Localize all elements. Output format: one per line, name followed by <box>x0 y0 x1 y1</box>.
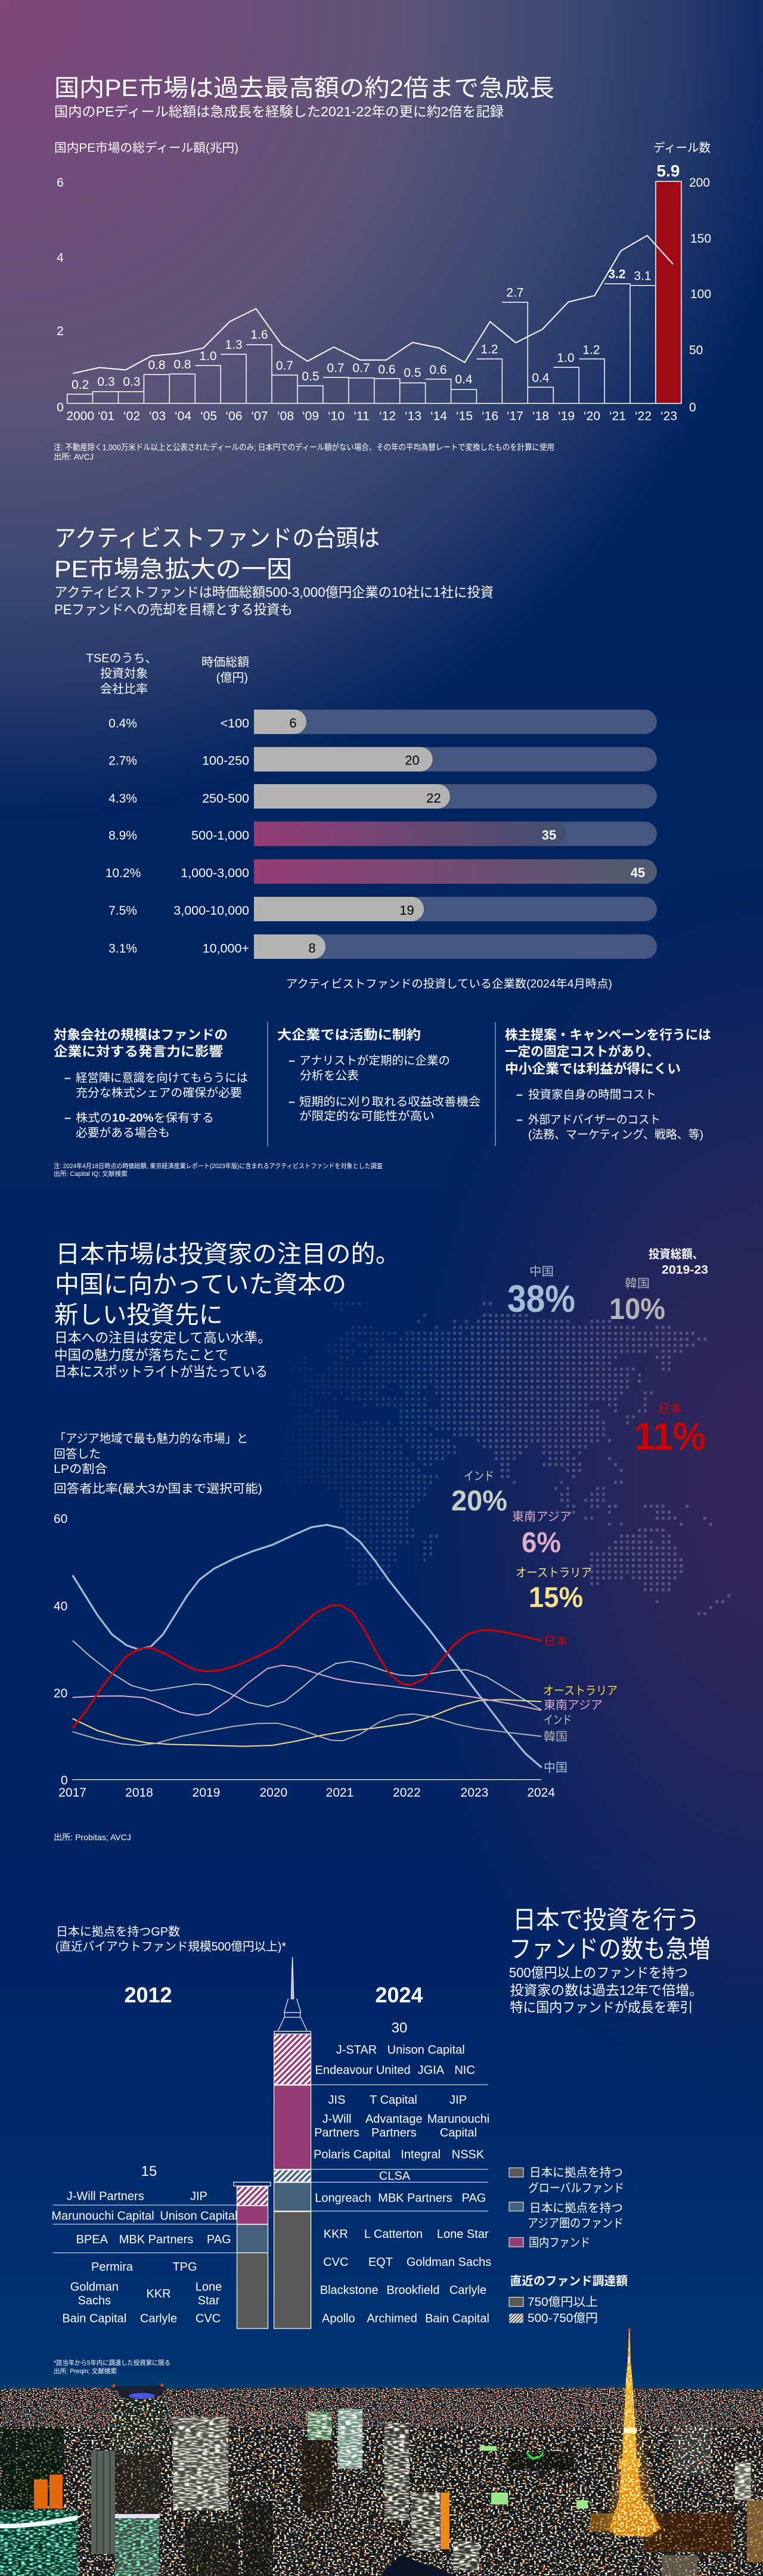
line: Korea <box>73 1714 541 1745</box>
line: Japan <box>73 1605 541 1727</box>
chart description <box>54 1432 262 1496</box>
chart title: 日本に拠点を持つGP数 <box>56 1925 180 1939</box>
fund names 2024: J-STAR <box>336 2044 377 2057</box>
fund names 2012: PAG <box>207 2233 231 2246</box>
fund names 2012: BPEA <box>76 2233 108 2246</box>
year labels: ‘06 <box>225 409 243 423</box>
region share: China: 中国 <box>529 1265 554 1278</box>
region share: Korea: 韓国 <box>625 1277 650 1290</box>
bar value labels: 0.7 <box>276 359 293 373</box>
legend: fund type: アジア圏のファンド <box>528 2217 624 2230</box>
column: large companies: 短期的に刈り取れる収益改善機会 <box>299 1095 480 1109</box>
fund names 2024: Endeavour United <box>315 2064 411 2077</box>
dark foreground wedge <box>380 2555 457 2576</box>
bar value labels: 2.7 <box>506 286 524 299</box>
fund names 2024: Marunouchi <box>427 2113 489 2126</box>
fund names 2012: Lone <box>196 2280 222 2293</box>
bar value labels: 5.9 <box>657 162 680 180</box>
subtitle <box>509 1965 703 2015</box>
year labels: ‘01 <box>98 409 114 423</box>
bar value labels: 0.4 <box>532 371 550 385</box>
left axis labels: 4 <box>57 251 64 265</box>
column: fixed costs: – <box>516 1088 523 1101</box>
fund names 2024: Partners <box>371 2126 417 2140</box>
right axis labels: 50 <box>689 343 703 357</box>
fund names 2012: Unison Capital <box>160 2210 237 2223</box>
fund names 2024: PAG <box>462 2191 486 2205</box>
left axis labels <box>57 176 64 414</box>
title: アクティビストファンドの台頭は <box>54 525 380 552</box>
horizontal bar chart: activist investments: 45 <box>631 865 645 880</box>
fund names 2012: Goldman <box>70 2280 119 2293</box>
fund names 2012: KKR <box>146 2287 171 2301</box>
region share: Australia: 15% <box>529 1582 583 1614</box>
title: 中国に向かっていた資本の <box>55 1271 346 1298</box>
fund names 2012: TPG <box>172 2261 197 2274</box>
section: Japan attractiveness <box>54 1240 730 1842</box>
fund names 2024: CLSA <box>379 2170 411 2183</box>
tower 2024 with spire <box>274 1957 311 2329</box>
title: ファンドの数も急増 <box>509 1935 711 1963</box>
horizontal bar chart: activist investments: 22 <box>426 791 441 806</box>
fund names 2012: Star <box>198 2295 220 2308</box>
TSE share labels: 0.4% <box>108 717 137 730</box>
line chart year labels: 2023 <box>461 1786 488 1800</box>
chart caption: アクティビストファンドの投資している企業数(2024年4月時点) <box>286 977 612 990</box>
column header: market cap: (億円) <box>216 671 248 685</box>
fund names 2024: J-Will <box>322 2113 351 2126</box>
right axis title: ディール数 <box>653 141 711 155</box>
footnote: 出所: Capital IQ; 文献検索 <box>54 1169 128 1178</box>
line labels <box>543 1634 618 1775</box>
bar value labels: 3.2 <box>608 267 626 281</box>
market cap labels: 1,000-3,000 <box>181 866 249 880</box>
subtitle: PEファンドへの売却を目標とする投資も <box>54 602 293 617</box>
horizontal bar chart: activist investments: 35 <box>542 828 556 843</box>
bar value labels: 0.8 <box>148 358 166 372</box>
column: large companies: – <box>289 1054 295 1067</box>
TSE share labels: 4.3% <box>108 792 137 806</box>
year labels: 2000 <box>66 409 94 423</box>
right axis labels: 150 <box>690 232 711 246</box>
column: large companies: 大企業では活動に制約 <box>277 1027 421 1042</box>
title: 日本市場は投資家の注目の的。 <box>55 1240 400 1268</box>
column: large companies: – <box>289 1095 295 1109</box>
bar value labels: 0.7 <box>327 361 345 375</box>
column: fixed costs: – <box>516 1113 523 1126</box>
year labels: ‘09 <box>302 409 319 423</box>
line labels: 中国 <box>544 1761 567 1775</box>
market cap labels: 3,000-10,000 <box>173 903 249 918</box>
green lights <box>527 2452 543 2458</box>
title: 新しい投資先に <box>54 1301 223 1329</box>
fund names 2024 <box>314 2044 491 2325</box>
bar value labels: 1.6 <box>250 328 268 342</box>
fund names 2024: Blackstone <box>320 2284 379 2297</box>
column: company size: 企業に対する発言力に影響 <box>54 1044 223 1059</box>
fund names 2024: Brookfield <box>387 2284 439 2297</box>
Tokyo Tower <box>608 2329 660 2537</box>
line labels: インド <box>544 1714 572 1727</box>
line labels: 日本 <box>544 1634 568 1648</box>
region share: India <box>451 1470 507 1517</box>
footnote: 注: 2024年4月18日時点の時価総額, 東京経済産業レポート(2023年版)に含まれるアクティビストファンドを対象とした調査 <box>54 1162 383 1170</box>
column: fixed costs <box>505 1027 711 1141</box>
line: Australia <box>73 1699 541 1747</box>
footnote: 注: 不動産除く1,000万米ドル以上と公表されたディールのみ; 日本円でのディール額がない場合、その年の平均為替レートで変換したものを計算に使用 <box>54 442 554 452</box>
region share: Southeast Asia <box>512 1510 572 1559</box>
subtitle: 500億円以上のファンドを持つ <box>509 1965 688 1980</box>
column: company size: 必要がある場合も <box>76 1126 170 1140</box>
column: company size: 対象会社の規模はファンドの <box>54 1027 228 1042</box>
column: company size: 経営陣に意識を向けてもらうには <box>76 1072 248 1085</box>
year labels: ‘19 <box>558 409 575 423</box>
fund names 2012: MBK Partners <box>119 2233 193 2246</box>
line chart axis labels: 60 <box>54 1512 67 1526</box>
column: fixed costs: 中小企業では利益が得にくい <box>505 1061 681 1076</box>
section: PE market growth <box>54 75 711 462</box>
fund names 2024: Integral <box>401 2148 441 2161</box>
region share: India: 20% <box>451 1485 507 1517</box>
bar value labels: 0.5 <box>302 370 320 383</box>
fund names 2024: L Catterton <box>364 2228 423 2241</box>
orange lit building <box>34 2475 63 2509</box>
right axis labels: 0 <box>689 401 696 414</box>
fund names 2024: Goldman Sachs <box>407 2256 491 2269</box>
year labels: ‘04 <box>175 409 191 423</box>
chart description: 「アジア地域で最も魅力的な市場」と <box>54 1432 248 1445</box>
region share: Southeast Asia: 東南アジア <box>512 1510 572 1524</box>
bar value labels: 1.2 <box>582 343 600 357</box>
chart description: 回答者比率(最大3か国まで選択可能) <box>54 1482 262 1496</box>
subtitle: 日本への注目は安定して高い水準。 <box>54 1330 271 1345</box>
column: company size: – <box>64 1072 71 1085</box>
fund names 2024: Capital <box>440 2126 477 2140</box>
right axis labels <box>689 176 711 414</box>
horizontal bar chart: activist investments: 20 <box>405 753 420 768</box>
fund names 2024: Longreach <box>315 2191 371 2205</box>
fund names 2024: EQT <box>368 2256 393 2269</box>
investment label: 投資総額、 <box>649 1247 703 1261</box>
column: fixed costs: 一定の固定コストがあり、 <box>505 1044 659 1059</box>
line: number of deals <box>73 236 673 373</box>
column: fixed costs: 株主提案・キャンペーンを行うには <box>505 1027 711 1042</box>
left axis labels: 6 <box>57 176 64 190</box>
fund names 2024: JIS <box>328 2094 345 2107</box>
year labels: ‘15 <box>456 409 473 423</box>
bar value labels: 0.6 <box>429 363 447 377</box>
line labels: オーストラリア <box>543 1685 618 1698</box>
region share: Australia <box>516 1566 592 1614</box>
year labels: ‘11 <box>353 409 370 423</box>
footnote: *該当年から5年内に調達した投資家に限る <box>54 2358 170 2367</box>
fund names 2024: Advantage <box>365 2113 423 2126</box>
Tokyo night skyline image <box>0 2329 763 2576</box>
fund names 2024: MBK Partners <box>378 2191 452 2205</box>
legend: fund type: 日本に拠点を持つ <box>529 2166 623 2179</box>
year labels: ‘14 <box>430 409 447 423</box>
fund names 2012 <box>51 2190 237 2325</box>
TSE share labels: 10.2% <box>106 866 141 880</box>
bar value labels: 0.5 <box>404 366 421 380</box>
column header: TSE share: 会社比率 <box>100 682 148 696</box>
bar value labels: 1.0 <box>557 351 575 365</box>
title <box>54 1240 400 1329</box>
bar value labels: 1.0 <box>199 349 217 363</box>
market cap labels: 100-250 <box>202 754 249 768</box>
bar value labels: 0.7 <box>352 361 370 375</box>
source: 出所: Probitas; AVCJ <box>54 1832 131 1842</box>
chart description: LPの割合 <box>54 1462 107 1476</box>
market cap labels: 250-500 <box>202 791 249 806</box>
bar value labels: 3.1 <box>634 270 652 283</box>
subtitle: アクティビストファンドは時価総額500-3,000億円企業の10社に1社に投資 <box>54 584 494 600</box>
total 2024: 30 <box>392 2020 407 2036</box>
tower 2012 <box>234 2182 271 2329</box>
section: funds in Japan <box>51 1906 711 2375</box>
line chart year labels: 2019 <box>193 1786 220 1800</box>
line chart: LP preference by market <box>73 1525 541 1767</box>
column: large companies <box>277 1027 480 1123</box>
title: 国内PE市場は過去最高額の約2倍まで急成長 <box>54 75 554 101</box>
fund names 2024: JIP <box>449 2094 467 2107</box>
column: company size <box>54 1027 248 1140</box>
year labels: ‘02 <box>123 409 140 423</box>
horizontal bar chart: activist investments: 6 <box>289 716 297 730</box>
column: company size: 株式の10-20%を保有する <box>76 1111 214 1125</box>
title: 日本で投資を行う <box>513 1906 700 1934</box>
legend: fund size: 500-750億円 <box>528 2311 598 2325</box>
year labels: ‘08 <box>277 409 294 423</box>
fund names 2024: NIC <box>454 2064 475 2077</box>
dotted world map <box>286 1302 730 1615</box>
fund names 2012: CVC <box>196 2312 221 2325</box>
right axis labels: 200 <box>689 176 710 190</box>
line chart year labels: 2021 <box>326 1786 353 1800</box>
subtitle: 特に国内ファンドが成長を牽引 <box>510 1999 693 2015</box>
line chart axis labels: 20 <box>54 1686 67 1701</box>
left axis labels: 0 <box>57 401 64 414</box>
investment label <box>649 1247 708 1277</box>
horizontal bar chart: activist investments <box>254 710 657 959</box>
line labels: 東南アジア <box>544 1698 603 1712</box>
column: large companies: が限定的な可能性が高い <box>299 1110 435 1123</box>
chart title: (直近バイアウトファンド規模500億円以上)* <box>55 1940 286 1953</box>
subtitle: 投資家の数は過去12年で倍増。 <box>510 1982 703 1998</box>
year labels: ‘17 <box>507 409 523 423</box>
line chart year labels: 2017 <box>58 1786 86 1800</box>
year labels: ‘18 <box>532 409 549 423</box>
legend: fund size: 直近のファンド調達額 <box>510 2274 628 2288</box>
column: large companies: アナリストが定期的に企業の <box>299 1054 450 1067</box>
column header: TSE share <box>86 652 157 696</box>
region share: Japan: 日本 <box>658 1402 682 1416</box>
region share: China: 38% <box>507 1277 575 1320</box>
year labels: ‘10 <box>328 409 345 423</box>
fund names 2024: Archimed <box>367 2312 417 2325</box>
right axis labels: 100 <box>690 287 711 301</box>
year labels: ‘23 <box>660 409 677 423</box>
market cap labels <box>173 716 249 955</box>
market cap labels: <100 <box>221 716 249 730</box>
line chart axis labels: 0 <box>61 1773 68 1788</box>
fund names 2024: KKR <box>324 2228 348 2241</box>
footnote <box>54 1162 383 1178</box>
line: China <box>73 1525 541 1767</box>
column header: TSE share: 投資対象 <box>100 667 148 680</box>
column: company size: – <box>64 1111 71 1125</box>
year labels: ‘13 <box>405 409 421 423</box>
year labels: ‘21 <box>609 409 626 423</box>
line chart year labels: 2020 <box>259 1786 287 1800</box>
year heading 2024: 2024 <box>375 1983 423 2007</box>
horizontal bar chart: activist investments: 19 <box>399 903 414 918</box>
bar value labels <box>72 162 680 392</box>
region share: Southeast Asia: 6% <box>522 1527 561 1559</box>
legend: fund type: 日本に拠点を持つ <box>529 2202 623 2215</box>
TSE share labels: 8.9% <box>108 829 137 843</box>
legend: fund size: 750億円以上 <box>528 2295 598 2309</box>
fund names 2024: T Capital <box>370 2094 417 2107</box>
line chart year labels <box>58 1786 555 1800</box>
chart description: 回答した <box>54 1447 101 1461</box>
year labels: ‘03 <box>149 409 166 423</box>
fund names 2012: Bain Capital <box>62 2312 126 2325</box>
bar value labels: 0.2 <box>72 378 89 392</box>
year labels: ‘20 <box>584 409 600 423</box>
region share: Korea: 10% <box>609 1292 665 1326</box>
line chart year labels: 2024 <box>527 1786 555 1800</box>
fund names 2012: Permira <box>91 2261 134 2274</box>
line labels: 韓国 <box>544 1730 567 1744</box>
TSE share labels: 3.1% <box>108 942 137 955</box>
market cap labels: 10,000+ <box>203 941 249 955</box>
region share: Australia: オーストラリア <box>516 1566 592 1580</box>
fund names 2024: Bain Capital <box>425 2312 489 2325</box>
title <box>509 1906 711 1963</box>
region share: Japan: 11% <box>634 1414 706 1458</box>
fund names 2024: JGIA <box>418 2064 445 2077</box>
fund names 2024: Carlyle <box>449 2284 486 2297</box>
TSE share labels: 7.5% <box>108 904 137 918</box>
section: activist funds <box>54 525 711 1178</box>
year labels <box>66 409 677 423</box>
line: India <box>73 1641 541 1710</box>
year heading 2012: 2012 <box>124 1983 172 2007</box>
column: large companies: 分析を公表 <box>300 1069 359 1082</box>
bar value labels: 0.8 <box>173 358 191 371</box>
year labels: ‘12 <box>379 409 396 423</box>
fund names 2024: Partners <box>314 2126 359 2140</box>
fund names 2024: Unison Capital <box>387 2044 465 2057</box>
bar value labels: 0.6 <box>378 363 396 377</box>
fund names 2012: JIP <box>190 2190 207 2203</box>
fund names 2024: Lone Star <box>437 2228 489 2241</box>
title <box>54 525 380 583</box>
TSE share labels: 2.7% <box>108 754 137 768</box>
fund names 2012: Sachs <box>78 2295 111 2308</box>
bar value labels: 0.3 <box>97 375 115 389</box>
bar value labels: 1.2 <box>480 342 498 357</box>
column: company size: 充分な株式シェアの確保が必要 <box>76 1086 242 1100</box>
year labels: ‘07 <box>251 409 268 423</box>
legend: fund type: グローバルファンド <box>528 2181 624 2195</box>
year labels: ‘05 <box>200 409 217 423</box>
line: Southeast Asia <box>73 1665 541 1716</box>
fund names 2012: J-Will Partners <box>67 2190 144 2203</box>
market cap labels: 500-1,000 <box>191 828 249 843</box>
legend: fund type <box>509 2166 624 2249</box>
fund names 2024: Apollo <box>322 2312 355 2325</box>
column: fixed costs: (法務、マーケティング、戦略、等) <box>528 1128 703 1141</box>
subtitle <box>54 1330 271 1379</box>
subtitle <box>54 584 494 617</box>
footnote <box>54 2358 170 2375</box>
investment label: 2019-23 <box>662 1264 708 1277</box>
footnote: 出所: Preqin; 文献検索 <box>54 2367 117 2375</box>
horizontal bar chart: activist investments: 8 <box>308 941 316 955</box>
column header: market cap: 時価総額 <box>201 655 249 669</box>
bar chart: total deal value <box>67 181 681 403</box>
subtitle: 日本にスポットライトが当たっている <box>54 1364 268 1379</box>
column: fixed costs: 投資家自身の時間コスト <box>528 1088 656 1101</box>
chart title <box>55 1925 286 1953</box>
footnote <box>54 442 554 462</box>
line chart year labels: 2018 <box>125 1786 153 1800</box>
title: PE市場急拡大の一因 <box>54 556 292 583</box>
fund names 2024: Polaris Capital <box>314 2148 390 2161</box>
fund names 2012: Marunouchi Capital <box>51 2210 154 2223</box>
fund names 2012: Carlyle <box>140 2312 177 2325</box>
rooftop building <box>113 2386 165 2399</box>
line chart axis labels: 40 <box>54 1599 67 1614</box>
subtitle: 中国の魅力度が落ちたことで <box>54 1347 228 1363</box>
year labels: ‘22 <box>635 409 652 423</box>
bar value labels: 0.4 <box>455 373 473 386</box>
column header: market cap <box>201 655 249 685</box>
fund names 2024: CVC <box>323 2256 348 2269</box>
left axis labels: 2 <box>57 324 64 338</box>
legend: fund size <box>509 2274 628 2325</box>
subtitle: 国内のPEディール総額は急成長を経験した2021-22年の更に約2倍を記録 <box>54 104 504 119</box>
legend: fund type: 国内ファンド <box>529 2236 590 2249</box>
column header: TSE share: TSEのうち、 <box>86 652 157 665</box>
left axis title: 国内PE市場の総ディール額(兆円) <box>54 141 238 155</box>
highlighted bar 2023 <box>656 181 681 403</box>
line chart axis labels <box>54 1512 68 1788</box>
bar value labels: 1.3 <box>225 338 243 352</box>
TSE share labels <box>106 717 141 955</box>
bar value labels: 0.3 <box>123 375 141 389</box>
fund names 2024: NSSK <box>452 2148 485 2161</box>
total 2012: 15 <box>141 2163 157 2179</box>
line chart year labels: 2022 <box>393 1786 421 1800</box>
region share: Korea <box>609 1277 665 1326</box>
column: fixed costs: 外部アドバイザーのコスト <box>528 1113 660 1126</box>
tall grey tower <box>91 2451 115 2554</box>
region share: India: インド <box>464 1470 494 1483</box>
year labels: ‘16 <box>482 409 498 423</box>
footnote: 出所: AVCJ <box>54 452 94 462</box>
